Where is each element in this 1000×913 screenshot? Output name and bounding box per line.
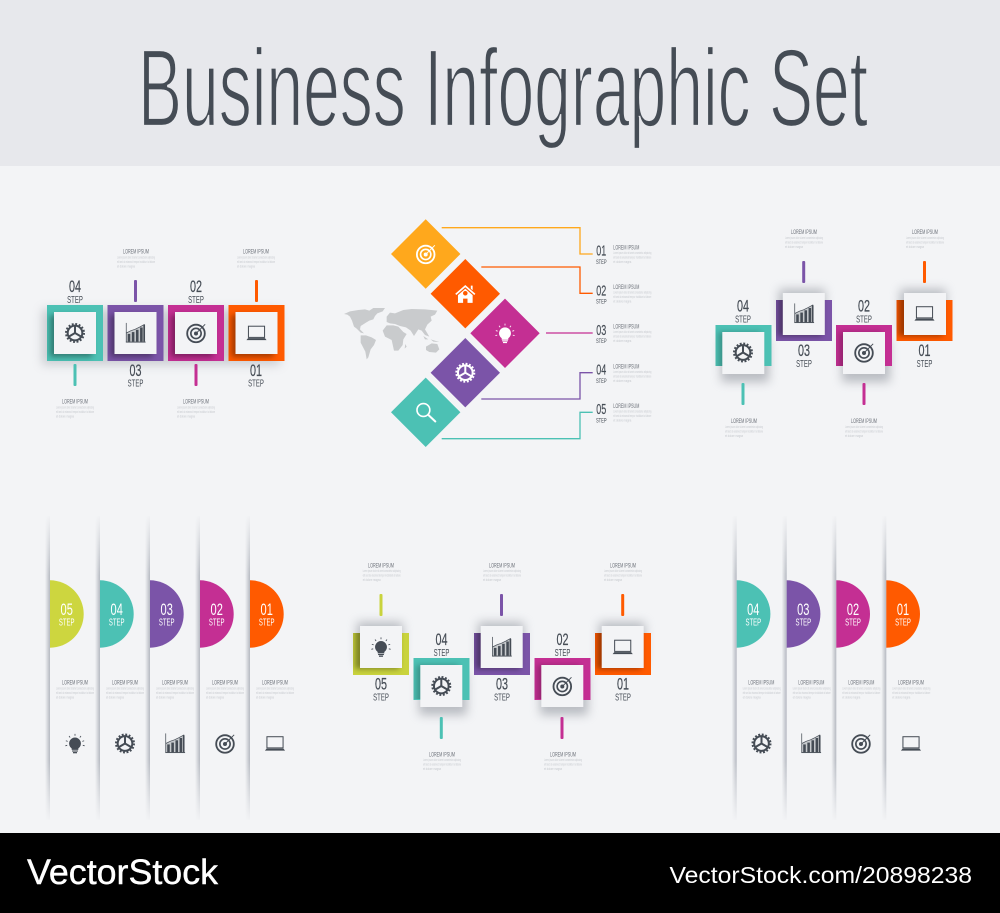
step 05 staggered square: [353, 625, 409, 675]
text block: step 02: et dolore magna: [845, 434, 863, 438]
text block: column 02: Lorem ipsum dolor sit amet consectetur adipiscing: [842, 686, 880, 690]
connector ticks: [380, 594, 624, 739]
step 04 text: LOREM IPSUM: [613, 363, 639, 370]
half circle 04: [737, 580, 770, 648]
text block: step 01: Lorem ipsum dolor sit amet consectetur adipiscing: [604, 569, 642, 573]
text block: step 03: et dolore magna: [785, 245, 803, 249]
text block: step 04: elit sed do eiusmod tempor incididunt ut labore: [423, 762, 461, 766]
text block: step 03: elit sed do eiusmod tempor incididunt ut labore: [483, 574, 521, 578]
text block: step 02: elit sed do eiusmod tempor incididunt ut labore: [544, 762, 582, 766]
step 04 text: et dolore magna: [613, 379, 631, 383]
text block: step 03: [785, 229, 823, 249]
text block: step 05: et dolore magna: [363, 578, 381, 582]
step labels: 01: [250, 362, 262, 380]
step 04 text: Lorem ipsum dolor sit amet consectetur adipiscing: [613, 370, 651, 374]
text block: column 03: LOREM IPSUM: [798, 680, 824, 686]
text block: step 05: Lorem ipsum dolor sit amet consectetur adipiscing: [363, 569, 401, 573]
text block: column 05: LOREM IPSUM: [62, 680, 88, 686]
half circle 01: STEP: [259, 618, 275, 629]
step 05 text: STEP: [596, 417, 607, 424]
text block: step 02: Lorem ipsum dolor sit amet consectetur adipiscing: [845, 425, 883, 429]
half circle 04: STEP: [745, 618, 761, 629]
world map: [344, 308, 439, 359]
step labels: 01: [617, 675, 629, 693]
text block: step 01: LOREM IPSUM: [243, 248, 269, 256]
text block: column 01: elit sed do eiusmod tempor incididunt ut labore: [256, 691, 294, 695]
text block: step 02: [845, 418, 883, 438]
step labels: 04: [436, 631, 448, 649]
step labels: 05: [375, 675, 387, 693]
panel: five staggered steps: [353, 562, 651, 771]
text block: column 03: LOREM IPSUM: [162, 680, 188, 686]
text block: column 03: [793, 680, 831, 700]
step 03 square with chart icon: [108, 305, 164, 361]
text block: column 02: et dolore magna: [842, 696, 860, 700]
half circle 02: STEP: [209, 618, 225, 629]
text block: step 02: LOREM IPSUM: [851, 418, 877, 425]
step 03 text: STEP: [596, 338, 607, 345]
text block: step 02: et dolore magna: [177, 414, 195, 418]
text block: step 04: Lorem ipsum dolor sit amet consectetur adipiscing: [56, 406, 94, 410]
panel: five vertical fold columns: [45, 516, 294, 820]
half circle 02: 02: [211, 601, 223, 619]
column icons: [753, 733, 921, 753]
step 02 text: STEP: [596, 299, 607, 306]
text block: column 01: Lorem ipsum dolor sit amet consectetur adipiscing: [892, 686, 930, 690]
text block: step 01: elit sed do eiusmod tempor incididunt ut labore: [237, 260, 275, 264]
half circle 05: STEP: [59, 618, 75, 629]
panel: four staggered steps: [716, 229, 952, 438]
step 01 square with laptop icon: [228, 305, 284, 361]
step labels: STEP: [856, 314, 872, 326]
step 05 text: 05: [596, 401, 606, 418]
step 01 text: [596, 243, 651, 266]
text block: step 02: et dolore magna: [544, 767, 562, 771]
text block: column 04: Lorem ipsum dolor sit amet consectetur adipiscing: [106, 686, 144, 690]
half circle 03: 03: [161, 601, 173, 619]
text block: step 04: elit sed do eiusmod tempor incididunt ut labore: [56, 410, 94, 414]
panel: diamonds with world map: [344, 219, 651, 447]
step 02 text: 02: [596, 282, 606, 299]
step 03 text: 03: [596, 322, 606, 339]
text block: column 04: LOREM IPSUM: [112, 680, 138, 686]
half circle 01: STEP: [895, 618, 911, 629]
text block: step 05: LOREM IPSUM: [368, 562, 394, 569]
half circle 04: STEP: [109, 618, 125, 629]
step 02 text: [596, 282, 651, 306]
text block: step 01: elit sed do eiusmod tempor incididunt ut labore: [906, 240, 944, 244]
fold shadows: [732, 516, 886, 820]
text block: column 02: elit sed do eiusmod tempor incididunt ut labore: [206, 691, 244, 695]
step labels: STEP: [434, 648, 450, 659]
text block: column 04: [743, 680, 781, 700]
step 04 staggered square: [716, 325, 772, 374]
half circle 05: 05: [61, 601, 73, 619]
half circle 03: STEP: [795, 618, 811, 629]
text block: step 04: [56, 398, 94, 418]
text block: column 02: elit sed do eiusmod tempor incididunt ut labore: [842, 691, 880, 695]
footer brand: VectorStock: [27, 853, 219, 892]
text block: column 01: [892, 680, 930, 700]
text block: column 03: elit sed do eiusmod tempor incididunt ut labore: [793, 691, 831, 695]
text block: step 02: LOREM IPSUM: [550, 751, 576, 758]
text block: column 02: Lorem ipsum dolor sit amet consectetur adipiscing: [206, 686, 244, 690]
text block: column 03: et dolore magna: [156, 696, 174, 700]
text block: column 04: LOREM IPSUM: [748, 680, 774, 686]
text block: step 02: elit sed do eiusmod tempor incididunt ut labore: [177, 410, 215, 414]
half circle 02: 02: [847, 601, 859, 619]
text block: column 04: Lorem ipsum dolor sit amet consectetur adipiscing: [743, 686, 781, 690]
step 03 text: LOREM IPSUM: [613, 324, 639, 331]
text block: column 05: et dolore magna: [56, 696, 74, 700]
step 03 text: et dolore magna: [613, 339, 631, 343]
step 05 text: [596, 401, 651, 424]
text block: column 04: et dolore magna: [106, 696, 124, 700]
step labels: STEP: [615, 692, 631, 704]
step 02 staggered square: [836, 325, 892, 374]
text block: step 04: Lorem ipsum dolor sit amet consectetur adipiscing: [423, 758, 461, 762]
step 01 staggered square: [595, 625, 651, 675]
step labels: 03: [798, 342, 810, 360]
step labels: 02: [190, 278, 202, 296]
diamond 01 with target icon: [391, 219, 460, 289]
text block: step 01: et dolore magna: [906, 245, 924, 249]
text block: step 01: LOREM IPSUM: [912, 229, 938, 236]
step labels: STEP: [494, 692, 510, 704]
text block: column 05: elit sed do eiusmod tempor incididunt ut labore: [56, 691, 94, 695]
text block: step 02: Lorem ipsum dolor sit amet consectetur adipiscing: [544, 758, 582, 762]
text block: column 02: LOREM IPSUM: [848, 680, 874, 686]
text block: column 01: Lorem ipsum dolor sit amet consectetur adipiscing: [256, 686, 294, 690]
connector ticks: [74, 280, 258, 386]
step 04 staggered square: [414, 658, 470, 707]
text block: column 01: et dolore magna: [892, 696, 910, 700]
half circle 02: [200, 580, 234, 648]
step labels: STEP: [796, 359, 812, 370]
text block: step 03: et dolore magna: [483, 578, 501, 582]
text block: step 01: et dolore magna: [604, 578, 622, 582]
text block: step 04: LOREM IPSUM: [731, 418, 757, 425]
text block: step 04: et dolore magna: [423, 767, 441, 771]
step 03 staggered square: [776, 292, 832, 341]
diamond 04 with gear icon: [431, 338, 500, 407]
text block: step 03: elit sed do eiusmod tempor incididunt ut labore: [117, 260, 155, 264]
step labels: [373, 631, 631, 704]
text block: column 05: Lorem ipsum dolor sit amet consectetur adipiscing: [56, 686, 94, 690]
text block: step 02: Lorem ipsum dolor sit amet consectetur adipiscing: [177, 406, 215, 410]
text block: step 03: LOREM IPSUM: [489, 562, 515, 569]
text block: step 01: elit sed do eiusmod tempor incididunt ut labore: [604, 574, 642, 578]
step 02 staggered square: [534, 658, 590, 707]
text block: step 04: et dolore magna: [56, 414, 74, 418]
step 01 text: elit sed do eiusmod tempor incididunt ut labore: [613, 256, 651, 260]
step 05 text: elit sed do eiusmod tempor incididunt ut labore: [613, 414, 651, 418]
step labels: 03: [496, 675, 508, 693]
step 01 text: LOREM IPSUM: [613, 244, 639, 252]
text block: step 01: et dolore magna: [237, 264, 255, 268]
step 04 text: elit sed do eiusmod tempor incididunt ut labore: [613, 374, 651, 378]
step 02 text: elit sed do eiusmod tempor incididunt ut labore: [613, 295, 651, 299]
text block: step 02: [177, 398, 215, 418]
text block: step 04: LOREM IPSUM: [429, 751, 455, 758]
half circle 01: 01: [897, 601, 909, 619]
text block: step 03: Lorem ipsum dolor sit amet consectetur adipiscing: [483, 569, 521, 573]
step 03 text: elit sed do eiusmod tempor incididunt ut labore: [613, 335, 651, 339]
half circle 02: [836, 580, 870, 648]
text block: column 01: LOREM IPSUM: [898, 680, 924, 686]
half circle 03: [150, 580, 184, 648]
text block: column 04: et dolore magna: [743, 696, 761, 700]
connector ticks: [742, 261, 926, 405]
connector lines: [442, 228, 593, 439]
text block: column 01: elit sed do eiusmod tempor incididunt ut labore: [892, 691, 930, 695]
step 02 text: LOREM IPSUM: [613, 284, 639, 291]
step 04 text: 04: [596, 362, 606, 378]
step 01 text: Lorem ipsum dolor sit amet consectetur adipiscing: [613, 251, 651, 255]
step labels: STEP: [128, 378, 144, 390]
step labels: STEP: [67, 295, 83, 306]
text block: step 05: elit sed do eiusmod tempor incididunt ut labore: [363, 574, 401, 578]
text block: step 01: Lorem ipsum dolor sit amet consectetur adipiscing: [237, 256, 275, 260]
text block: step 04: LOREM IPSUM: [62, 398, 88, 406]
half circle 01: 01: [261, 601, 273, 619]
step labels: STEP: [917, 359, 933, 370]
text block: step 02: [544, 751, 582, 771]
text block: step 04: elit sed do eiusmod tempor incididunt ut labore: [725, 430, 763, 434]
header band: [0, 0, 1000, 166]
footer band: [0, 833, 1000, 913]
step 02 square with target icon: [168, 305, 224, 361]
text block: step 03: [483, 562, 521, 582]
text block: step 03: [117, 248, 155, 268]
diamond 03 with bulb icon: [470, 299, 540, 368]
half circle 02: STEP: [845, 618, 861, 629]
text block: column 02: LOREM IPSUM: [212, 680, 238, 686]
text block: step 01: [906, 229, 944, 249]
step 03 staggered square: [474, 625, 530, 675]
step labels: STEP: [735, 314, 751, 326]
text block: step 03: Lorem ipsum dolor sit amet consectetur adipiscing: [117, 256, 155, 260]
text block: column 04: elit sed do eiusmod tempor incididunt ut labore: [743, 691, 781, 695]
text block: step 04: [725, 418, 763, 438]
text block: column 03: Lorem ipsum dolor sit amet consectetur adipiscing: [793, 686, 831, 690]
step 01 text: STEP: [596, 259, 607, 266]
text block: column 01: LOREM IPSUM: [262, 680, 288, 686]
step labels: STEP: [188, 295, 204, 306]
text block: step 03: LOREM IPSUM: [791, 229, 817, 236]
step labels: 02: [556, 631, 568, 649]
text block: step 01: Lorem ipsum dolor sit amet consectetur adipiscing: [906, 236, 944, 240]
step 01 text: 01: [596, 243, 606, 260]
step 02 text: Lorem ipsum dolor sit amet consectetur adipiscing: [613, 291, 651, 295]
step labels: 02: [858, 298, 870, 316]
text block: column 03: Lorem ipsum dolor sit amet consectetur adipiscing: [156, 686, 194, 690]
half circle 04: 04: [111, 601, 123, 619]
text block: column 02: et dolore magna: [206, 696, 224, 700]
step labels: [735, 298, 933, 370]
step labels: STEP: [248, 378, 264, 390]
step 02 text: et dolore magna: [613, 300, 631, 304]
half circle 03: [787, 580, 820, 648]
step labels: 03: [130, 362, 142, 380]
text block: step 01: [237, 248, 275, 268]
text block: step 01: [604, 562, 642, 582]
text block: column 01: [256, 680, 294, 700]
step 04 text: [596, 362, 651, 385]
text block: column 02: [206, 680, 244, 700]
half circle 04: 04: [747, 601, 759, 619]
half circle 01: [250, 580, 284, 648]
step labels: 04: [69, 278, 81, 296]
text block: column 02: [842, 680, 880, 700]
step 01 text: et dolore magna: [613, 260, 631, 264]
panel: four vertical fold columns: [732, 516, 930, 820]
text block: step 04: [423, 751, 461, 771]
half circle 01: [886, 580, 920, 648]
text block: column 03: [156, 680, 194, 700]
step labels: [67, 278, 264, 390]
step 04 text: STEP: [596, 378, 607, 385]
step 05 text: et dolore magna: [613, 418, 631, 422]
step 05 text: Lorem ipsum dolor sit amet consectetur adipiscing: [613, 409, 651, 413]
step labels: STEP: [373, 692, 389, 704]
step 05 text: LOREM IPSUM: [613, 403, 639, 410]
text block: step 04: et dolore magna: [725, 434, 743, 438]
text block: step 02: LOREM IPSUM: [183, 398, 209, 406]
text block: step 03: Lorem ipsum dolor sit amet consectetur adipiscing: [785, 236, 823, 240]
text block: column 01: et dolore magna: [256, 696, 274, 700]
step 01 staggered square: [896, 292, 952, 341]
column icons: [65, 733, 285, 753]
fold shadows: [45, 516, 250, 820]
text block: step 03: LOREM IPSUM: [123, 248, 149, 256]
diamond 05 with magnifier icon: [391, 378, 460, 447]
text block: step 03: et dolore magna: [117, 264, 135, 268]
step 04 square with gear icon: [47, 305, 103, 361]
step labels: 04: [737, 298, 749, 316]
text block: column 05: [56, 680, 94, 700]
step labels: STEP: [555, 648, 571, 659]
text block: step 02: elit sed do eiusmod tempor incididunt ut labore: [845, 430, 883, 434]
text block: column 03: et dolore magna: [793, 696, 811, 700]
half circle 05: [50, 580, 84, 648]
text block: step 01: LOREM IPSUM: [610, 562, 636, 569]
half circle 03: STEP: [159, 618, 175, 629]
text block: step 03: elit sed do eiusmod tempor incididunt ut labore: [785, 240, 823, 244]
step 03 text: [596, 322, 651, 345]
text block: step 04: Lorem ipsum dolor sit amet consectetur adipiscing: [725, 425, 763, 429]
step labels: 01: [918, 342, 930, 360]
diamond 02 with house icon: [431, 259, 500, 328]
half circle 04: [100, 580, 134, 648]
text block: column 04: elit sed do eiusmod tempor incididunt ut labore: [106, 691, 144, 695]
text block: column 03: elit sed do eiusmod tempor incididunt ut labore: [156, 691, 194, 695]
footer url: VectorStock.com/20898238: [670, 862, 972, 888]
text block: column 04: [106, 680, 144, 700]
panel: four steps row: [42, 248, 284, 418]
half circle 03: 03: [797, 601, 809, 619]
text block: step 05: [363, 562, 401, 582]
step 03 text: Lorem ipsum dolor sit amet consectetur adipiscing: [613, 330, 651, 334]
